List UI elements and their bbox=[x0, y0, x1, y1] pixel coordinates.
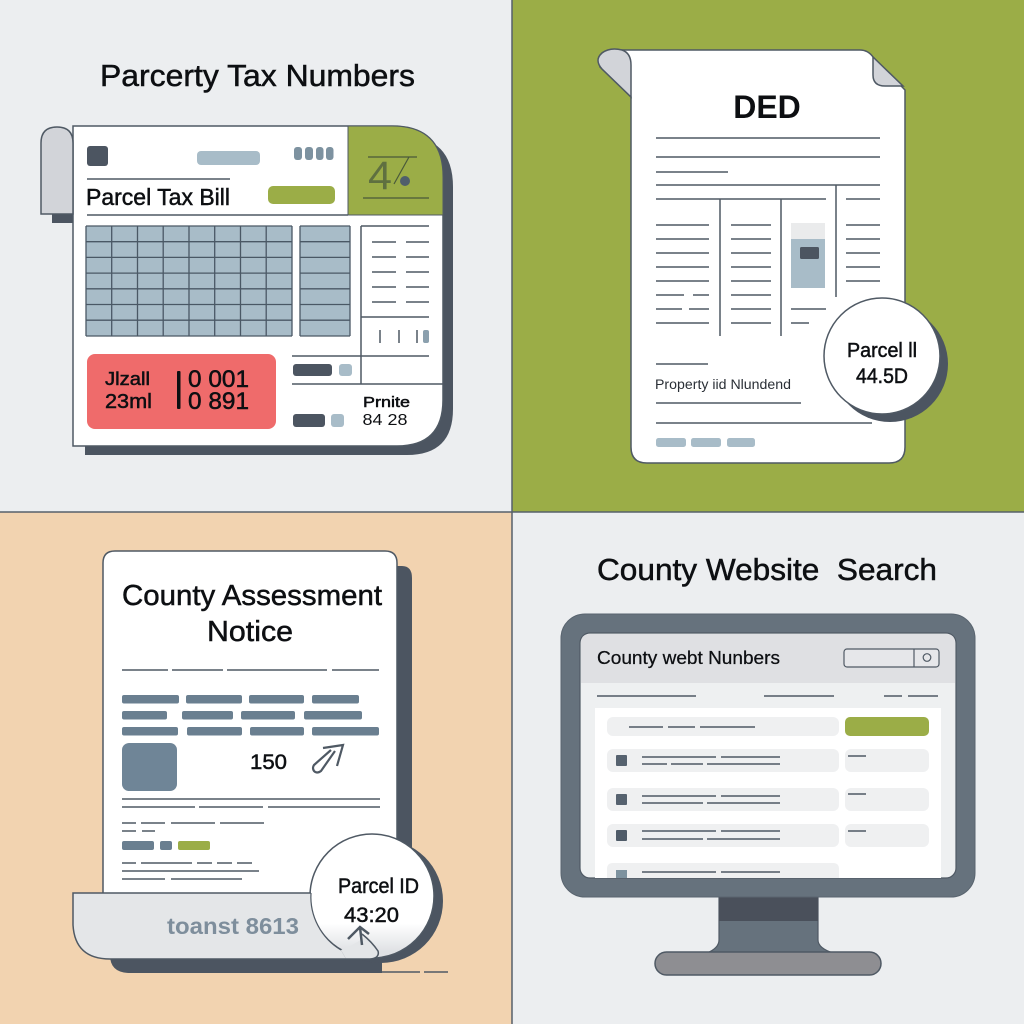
icon: curled top-left corner bbox=[598, 49, 631, 97]
text rules bbox=[122, 670, 380, 879]
red amount due box: Jlzall bbox=[105, 369, 150, 389]
print label: Prnite bbox=[363, 394, 410, 411]
green tax corner with symbol: 4 bbox=[368, 154, 392, 198]
heading: County Assessment Notice: Notice bbox=[207, 616, 293, 648]
search box bbox=[844, 649, 939, 667]
tax bill document bbox=[41, 126, 453, 455]
monitor stand bbox=[655, 897, 881, 975]
value: 150: 150 bbox=[250, 751, 287, 774]
icon: folded top-right corner bbox=[873, 57, 903, 86]
small status pills bbox=[293, 364, 352, 427]
callout: parcel id badge: Parcel ID bbox=[338, 875, 419, 898]
heading: County Assessment Notice: County Assessment bbox=[122, 580, 382, 612]
panel: property tax bill bbox=[0, 0, 512, 512]
icon: pointer arrow bbox=[348, 927, 369, 945]
red amount due box: 23ml bbox=[105, 391, 152, 413]
right column rules bbox=[292, 226, 443, 384]
results panel bbox=[595, 708, 941, 878]
status pills bbox=[122, 841, 210, 850]
result row 1 bbox=[607, 749, 929, 772]
bottom pills bbox=[656, 438, 755, 447]
image block bbox=[791, 223, 825, 288]
monitor bbox=[561, 614, 975, 975]
title: County Website Search: County Website Search bbox=[597, 553, 937, 587]
callout: parcel id badge: Parcel ll bbox=[847, 340, 917, 362]
callout: parcel id badge: 44.5D bbox=[856, 365, 908, 388]
search row bbox=[607, 717, 929, 736]
red amount due box: 0 001 bbox=[188, 366, 249, 393]
result row 2 bbox=[607, 788, 929, 811]
title: Parcerty Tax Numbers: Parcerty Tax Numbers bbox=[100, 59, 415, 93]
green tax corner with symbol bbox=[348, 126, 443, 215]
result row 3 bbox=[607, 824, 929, 847]
heading: County Assessment Notice bbox=[122, 580, 382, 648]
callout: parcel id badge bbox=[310, 834, 443, 963]
header marks bbox=[87, 146, 348, 215]
callout: parcel id badge bbox=[824, 298, 948, 422]
browser header: County webt Nunbers bbox=[597, 648, 780, 668]
red amount due box: 0 891 bbox=[188, 388, 249, 415]
label: property id number: Property iid Nlundend bbox=[655, 377, 791, 392]
document text lines bbox=[656, 138, 880, 423]
bottom curled scroll bbox=[73, 893, 378, 959]
photo placeholder square bbox=[122, 743, 177, 791]
green status pill bbox=[268, 186, 335, 204]
callout: parcel id badge: 43:20 bbox=[344, 904, 399, 927]
main table grid bbox=[86, 226, 292, 336]
panel: deed bbox=[512, 0, 1024, 512]
panel: county website search bbox=[512, 512, 1024, 1024]
side table grid bbox=[300, 226, 350, 336]
monitor bezel bbox=[561, 614, 975, 897]
heading: DED: DED bbox=[733, 89, 801, 125]
red amount due box bbox=[87, 354, 276, 429]
data bars bbox=[122, 695, 379, 736]
heading: Parcel Tax Bill: Parcel Tax Bill bbox=[86, 184, 230, 210]
screen bbox=[580, 633, 956, 878]
print label: 84 28 bbox=[362, 412, 408, 429]
scroll label: toanst 8613 bbox=[167, 913, 299, 939]
icon: rolled paper edge bbox=[41, 127, 73, 214]
print label bbox=[362, 394, 410, 429]
icon: outlined arrow bbox=[313, 745, 343, 772]
browser header bbox=[581, 634, 955, 683]
deed document bbox=[598, 49, 905, 463]
notice document bbox=[103, 551, 412, 973]
result row 4, cut off bbox=[607, 863, 839, 878]
panel: county assessment notice bbox=[0, 512, 512, 1024]
